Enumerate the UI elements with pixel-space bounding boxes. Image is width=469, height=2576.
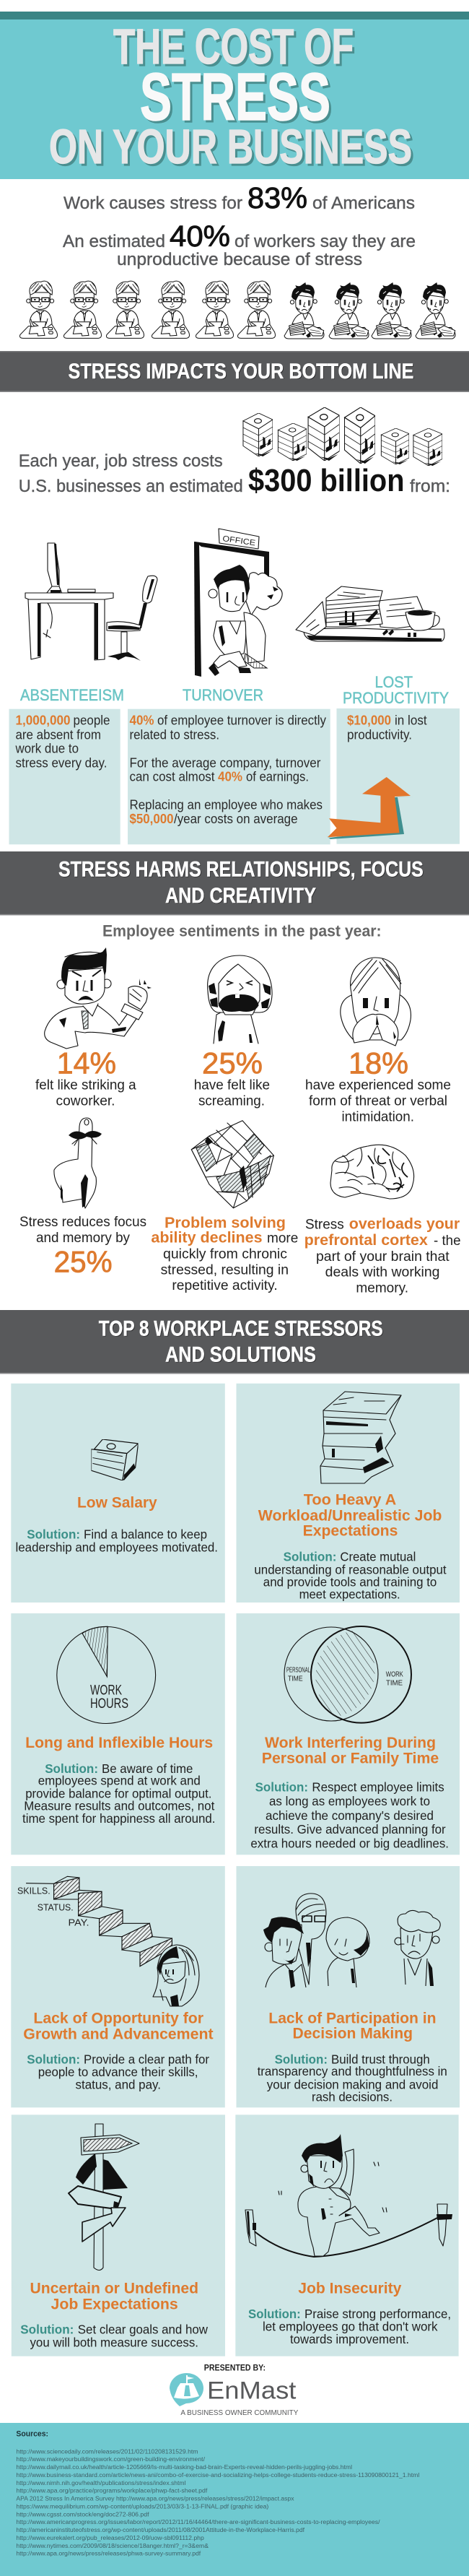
panel: too heavy a workload: and provide tools and training to bbox=[263, 1575, 437, 1590]
panel: absenteeism: are absent from bbox=[16, 727, 101, 742]
text: reduces focus and memory: Stress reduces focus bbox=[19, 1215, 146, 1230]
panel: lack of participation: Decision Making bbox=[293, 2026, 413, 2042]
panel: low salary: Solution: bbox=[27, 1527, 80, 1542]
panel: work interfering with personal time: Respect employee limits bbox=[312, 1780, 444, 1795]
panel: low salary bbox=[11, 1384, 225, 1603]
section header: bottom line: STRESS IMPACTS YOUR BOTTOM LINE bbox=[69, 360, 414, 384]
panel: turnover: /year costs on average bbox=[174, 812, 297, 826]
panel: too heavy a workload bbox=[237, 1384, 460, 1603]
title banner: STRESS bbox=[142, 61, 333, 136]
panel: too heavy a workload: Create mutual bbox=[340, 1550, 416, 1564]
panel: sources: http://www.americanprogress.org/issues/labor/report/2012/11/16/44464/there-are-significant-business-costs-to-replacing-employees/ bbox=[16, 2519, 380, 2525]
panel: long and inflexible hours: Solution: bbox=[45, 1761, 98, 1776]
text: overloads prefrontal cortex bbox=[304, 1216, 460, 1296]
panel: too heavy a workload: Expectations bbox=[303, 1523, 398, 1540]
icon: screaming woman bbox=[208, 955, 272, 1044]
icon: three coworkers huddled and one left out bbox=[263, 1894, 440, 1988]
stat: 83 percent bbox=[63, 181, 415, 214]
panel: sources: http://www.sciencedaily.com/releases/2011/02/110208131529.htm bbox=[16, 2448, 198, 2455]
text: overloads prefrontal cortex: prefrontal cortex bbox=[304, 1232, 428, 1249]
panel: uncertain job expectations bbox=[12, 2115, 225, 2356]
panel: sources bbox=[0, 2423, 469, 2576]
subheading: employee sentiments: Employee sentiments in the past year: bbox=[102, 922, 382, 940]
panel: work interfering with personal time: Solution: bbox=[255, 1780, 308, 1795]
text: overloads prefrontal cortex: Stress bbox=[305, 1218, 344, 1233]
cost statement: from: bbox=[410, 477, 450, 496]
icon: personal and work time venn diagram: TIME bbox=[386, 1679, 403, 1687]
stat: 18 percent threat or intimidation bbox=[305, 1046, 451, 1124]
panel: uncertain job expectations: Solution: bbox=[20, 2323, 74, 2337]
icon: employees walking out of the office bbox=[194, 529, 282, 677]
panel: lack of participation: your decision making and avoid bbox=[267, 2077, 438, 2091]
panel: long and inflexible hours: provide balance for optimal output. bbox=[25, 1786, 211, 1800]
panel: job insecurity: towards improvement. bbox=[290, 2332, 409, 2346]
section header: top 8 stressors: AND SOLUTIONS bbox=[165, 1343, 316, 1367]
panel: too heavy a workload: understanding of reasonable output bbox=[254, 1562, 447, 1577]
stat: 40 percent: 40% bbox=[170, 220, 230, 253]
panel: turnover: related to stress. bbox=[130, 727, 219, 742]
panel: long and inflexible hours: Measure results and outcomes, not bbox=[24, 1799, 214, 1813]
icon: work hours pie chart: WORK bbox=[90, 1683, 122, 1699]
icon: personal and work time venn diagram: TIME bbox=[288, 1675, 303, 1683]
stat: 14 percent felt like striking a coworker bbox=[35, 1046, 136, 1109]
stat: 40 percent: of workers say they are bbox=[234, 232, 416, 251]
section header: top 8 stressors: TOP 8 WORKPLACE STRESSORS bbox=[99, 1317, 383, 1340]
panel: work interfering with personal time bbox=[237, 1613, 460, 1855]
panel: long and inflexible hours: Be aware of time bbox=[102, 1761, 193, 1776]
panel: turnover: 40% bbox=[130, 713, 154, 727]
section header: relationships, focus and creativity: AND CREATIVITY bbox=[166, 885, 317, 908]
icon: personal and work time venn diagram bbox=[284, 1626, 411, 1723]
icon: work hours pie chart bbox=[57, 1626, 156, 1723]
panel: turnover bbox=[128, 709, 330, 844]
icon: personal and work time venn diagram: WORK bbox=[386, 1671, 403, 1679]
cost statement: Each year, job stress costs bbox=[19, 451, 223, 471]
label: absenteeism: ABSENTEEISM bbox=[20, 686, 124, 704]
panel: lost productivity bbox=[336, 708, 460, 844]
text: reduces focus and memory bbox=[19, 1215, 146, 1279]
icon: staircase with skills status pay and worried woman: STATUS. bbox=[38, 1902, 74, 1913]
stat: 14 percent felt like striking a coworker: felt like striking a bbox=[35, 1077, 136, 1093]
title banner: STRESS bbox=[140, 59, 330, 134]
panel: long and inflexible hours: time spent for happiness all around. bbox=[22, 1811, 215, 1826]
panel: work interfering with personal time: Personal or Family Time bbox=[262, 1751, 439, 1767]
logo: EnMast bbox=[170, 2373, 299, 2417]
stat: 25 percent felt like screaming: 25% bbox=[202, 1046, 263, 1080]
panel: lost productivity: $10,000 bbox=[347, 713, 391, 727]
label: lost productivity: LOST bbox=[375, 673, 413, 691]
label: lost productivity bbox=[343, 673, 449, 707]
panel: turnover: of earnings. bbox=[246, 770, 309, 784]
panel: sources: http://www.dailymail.co.uk/health/article-1205669/Is-multi-tasking-bad-brain-Experts-reveal-hidden-perils-juggling-jobs.html bbox=[16, 2464, 352, 2471]
cost statement bbox=[19, 451, 450, 498]
panel: absenteeism: work due to bbox=[15, 741, 79, 755]
panel: work interfering with personal time: extra hours needed or big deadlines. bbox=[250, 1836, 449, 1850]
panel: absenteeism: people bbox=[74, 713, 110, 727]
text: overloads prefrontal cortex: memory. bbox=[356, 1280, 408, 1296]
text: problem solving declines: stressed, resulting in bbox=[161, 1262, 289, 1278]
panel: work interfering with personal time: results. Give advanced planning for bbox=[254, 1822, 446, 1836]
section header: bottom line bbox=[0, 351, 469, 392]
text: overloads prefrontal cortex: deals with working bbox=[325, 1265, 440, 1280]
section header: top 8 stressors bbox=[0, 1310, 469, 1374]
stat: 83 percent: 83% bbox=[247, 181, 307, 214]
text: reduces focus and memory: 25% bbox=[54, 1245, 113, 1279]
icon: signpost with conflicting arrows bbox=[69, 2124, 139, 2271]
stat: 18 percent threat or intimidation: form of threat or verbal bbox=[309, 1094, 447, 1109]
panel: sources: http://www.eurekalert.org/pub_releases/2012-09/uow-sbl091112.php bbox=[16, 2535, 204, 2541]
panel: sources: http://www.makeyourbuildingswork.com/green-building-environment/ bbox=[16, 2456, 206, 2463]
panel: lack of participation: Lack of Participation in bbox=[268, 2011, 436, 2027]
panel: turnover: of employee turnover is directly bbox=[157, 713, 326, 727]
panel: job insecurity: Solution: bbox=[248, 2307, 301, 2321]
text: problem solving declines bbox=[151, 1215, 298, 1293]
panel: turnover: For the average company, turnover bbox=[130, 755, 320, 770]
title banner: THE COST OF bbox=[113, 19, 354, 74]
panel: sources: APA 2012 Stress In America Survey http://www.apa.org/news/press/releases/stress/2012/impact.aspx bbox=[16, 2496, 294, 2502]
text: overloads prefrontal cortex: part of your brain that bbox=[316, 1249, 450, 1265]
panel: work interfering with personal time: achieve the company's desired bbox=[266, 1808, 434, 1823]
panel: lack of participation bbox=[237, 1866, 460, 2107]
panel: work interfering with personal time: as long as employees work to bbox=[269, 1794, 430, 1808]
icon: rising arrow bbox=[326, 777, 414, 839]
panel: turnover: can cost almost bbox=[130, 770, 215, 784]
panel: long and inflexible hours: employees spend at work and bbox=[38, 1774, 201, 1788]
icon: staircase with skills status pay and worried woman: SKILLS. bbox=[17, 1886, 51, 1896]
presented by label: PRESENTED BY: bbox=[204, 2362, 266, 2372]
icon: empty desk and chair bbox=[25, 543, 157, 661]
stat: 18 percent threat or intimidation: have experienced some bbox=[305, 1077, 451, 1093]
section header: bottom line: STRESS IMPACTS YOUR BOTTOM LINE bbox=[68, 360, 414, 383]
icon: man on a tightrope bbox=[245, 2134, 452, 2257]
panel: lack of participation: rash decisions. bbox=[312, 2089, 393, 2104]
logo: EnMast: EnMast bbox=[207, 2377, 297, 2405]
stat: 25 percent felt like screaming: screaming. bbox=[198, 1094, 265, 1109]
panel: uncertain job expectations: Set clear goals and how bbox=[78, 2323, 208, 2337]
panel: sources: http://www.apa.org/practice/programs/workplace/phwp-fact-sheet.pdf bbox=[16, 2488, 208, 2494]
stat: 40 percent: unproductive because of stress bbox=[117, 250, 362, 269]
text: problem solving declines: Problem solving bbox=[165, 1215, 286, 1231]
icon: employees walking out of the office: OFFICE bbox=[222, 534, 256, 547]
label: turnover: TURNOVER bbox=[183, 686, 263, 704]
icon: brain bbox=[330, 1145, 414, 1199]
stat: 25 percent felt like screaming bbox=[194, 1046, 270, 1109]
icon: personal and work time venn diagram: PERSONAL bbox=[286, 1667, 310, 1675]
icon: cash stack bbox=[91, 1439, 139, 1480]
title banner: THE COST OF bbox=[115, 21, 356, 77]
icon: stack of books and papers bbox=[320, 1392, 401, 1483]
icon: staircase with skills status pay and worried woman bbox=[17, 1876, 199, 2006]
icon: twisted puzzle cube bbox=[191, 1121, 273, 1208]
panel: long and inflexible hours bbox=[11, 1613, 225, 1855]
panel: lack of opportunity bbox=[11, 1866, 225, 2107]
panel: lack of opportunity: people to advance their skills, bbox=[38, 2065, 198, 2079]
icon: stacks of cash bbox=[243, 407, 442, 466]
panel: lack of opportunity: status, and pay. bbox=[75, 2078, 161, 2092]
panel: job insecurity bbox=[235, 2115, 459, 2356]
cost statement: $300 billion bbox=[248, 463, 404, 498]
panel: lost productivity: productivity. bbox=[347, 727, 412, 742]
panel: sources: http://americaninstituteofstress.org/wp-content/uploads/2011/08/2001Attitude-in-the-Workplace-Harris.pdf bbox=[16, 2527, 305, 2533]
panel: turnover: $50,000 bbox=[130, 812, 173, 826]
panel: job insecurity: let employees go that don't work bbox=[263, 2320, 438, 2334]
panel: uncertain job expectations: Uncertain or Undefined bbox=[30, 2281, 198, 2297]
stat: 83 percent: Work causes stress for bbox=[63, 194, 242, 213]
panel: lack of participation: Build trust through bbox=[331, 2052, 430, 2066]
label: lost productivity: PRODUCTIVITY bbox=[343, 689, 449, 707]
panel: sources: https://www.mequilibrium.com/wp-content/uploads/2013/03/3-1-13-FINAL.pdf (graphic idea) bbox=[16, 2503, 269, 2510]
panel: lack of participation: transparency and thoughtfulness in bbox=[258, 2064, 447, 2078]
panel: sources: http://www.apa.org/news/press/releases/phwa-survey-summary.pdf bbox=[16, 2551, 201, 2557]
stat: 14 percent felt like striking a coworker: coworker. bbox=[56, 1094, 115, 1109]
stat: 25 percent felt like screaming: have felt like bbox=[194, 1077, 270, 1093]
section header: relationships, focus and creativity: AND CREATIVITY bbox=[165, 884, 316, 908]
panel: low salary: leadership and employees motivated. bbox=[16, 1540, 218, 1554]
text: overloads prefrontal cortex: - the bbox=[434, 1233, 460, 1249]
text: problem solving declines: more bbox=[267, 1231, 298, 1246]
panel: absenteeism bbox=[9, 709, 120, 844]
stat: 40 percent bbox=[63, 220, 416, 269]
panel: sources: http://www.nytimes.com/2009/08/18/science/18anger.html?_r=3&em& bbox=[16, 2543, 209, 2549]
panel: lack of opportunity: Provide a clear path for bbox=[84, 2052, 209, 2067]
icon: frightened woman bbox=[341, 958, 411, 1046]
icon: staircase with skills status pay and worried woman: PAY. bbox=[68, 1917, 89, 1928]
stat: 40 percent: An estimated bbox=[63, 232, 165, 251]
stat: 83 percent: of Americans bbox=[312, 194, 415, 213]
text: reduces focus and memory: and memory by bbox=[36, 1231, 130, 1246]
panel: uncertain job expectations: Job Expectations bbox=[51, 2296, 178, 2312]
icon: finger with string bbox=[54, 1118, 102, 1208]
section header: top 8 stressors: AND SOLUTIONS bbox=[166, 1344, 317, 1368]
section header: top 8 stressors: TOP 8 WORKPLACE STRESSORS bbox=[100, 1317, 384, 1341]
panel: too heavy a workload: Solution: bbox=[284, 1550, 336, 1564]
icon: messy paperwork and coffee bbox=[296, 586, 444, 641]
panel: low salary: Low Salary bbox=[77, 1494, 157, 1511]
icon: angry man bbox=[45, 947, 152, 1049]
panel: absenteeism: stress every day. bbox=[16, 755, 107, 770]
text: overloads prefrontal cortex: overloads your bbox=[349, 1216, 460, 1233]
cost statement: U.S. businesses an estimated bbox=[19, 477, 243, 496]
text: problem solving declines: quickly from chronic bbox=[163, 1247, 287, 1262]
stat: 18 percent threat or intimidation: 18% bbox=[349, 1046, 408, 1080]
stat: 18 percent threat or intimidation: intimidation. bbox=[342, 1109, 414, 1124]
panel: work interfering with personal time: Work Interfering During bbox=[265, 1735, 436, 1751]
panel: sources: http://www.nimh.nih.gov/health/publications/stress/index.shtml bbox=[16, 2480, 186, 2486]
panel: sources: http://www.business-standard.com/article/news-ani/combo-of-exercise-and-socializing-helps-college-students-reduce-stress-113090800121_1.html bbox=[16, 2472, 420, 2479]
logo: EnMast: A BUSINESS OWNER COMMUNITY bbox=[180, 2409, 299, 2417]
panel: sources: http://www.cgsst.com/stock/eng/doc272-806.pdf bbox=[16, 2511, 149, 2518]
panel: turnover: 40% bbox=[218, 770, 242, 784]
panel: lack of opportunity: Lack of Opportunity for bbox=[33, 2011, 203, 2027]
panel: too heavy a workload: Too Heavy A bbox=[304, 1491, 396, 1508]
section header: relationships, focus and creativity bbox=[0, 851, 469, 915]
panel: lost productivity: in lost bbox=[395, 713, 427, 727]
panel: lack of opportunity: Growth and Advancement bbox=[23, 2026, 214, 2042]
panel: too heavy a workload: meet expectations. bbox=[299, 1587, 400, 1601]
panel: lack of participation: Solution: bbox=[275, 2052, 328, 2066]
panel: job insecurity: Job Insecurity bbox=[298, 2281, 402, 2297]
text: problem solving declines: repetitive activity. bbox=[172, 1278, 278, 1293]
text: problem solving declines: ability declines bbox=[151, 1230, 263, 1246]
icon: work hours pie chart: HOURS bbox=[90, 1696, 128, 1712]
panel: lack of opportunity: Solution: bbox=[27, 2052, 80, 2067]
stat: 14 percent felt like striking a coworker: 14% bbox=[57, 1046, 116, 1080]
panel: sources: Sources: bbox=[16, 2429, 48, 2438]
panel: long and inflexible hours: Long and Inflexible Hours bbox=[25, 1735, 213, 1751]
panel: absenteeism: 1,000,000 bbox=[16, 713, 71, 727]
panel: too heavy a workload: Workload/Unrealistic Job bbox=[258, 1507, 442, 1524]
pictogram: six calm and four stressed workers bbox=[20, 281, 455, 339]
panel: low salary: Find a balance to keep bbox=[84, 1527, 207, 1542]
title banner bbox=[0, 12, 469, 179]
panel: uncertain job expectations: you will both measure success. bbox=[30, 2335, 198, 2349]
panel: turnover: Replacing an employee who makes bbox=[130, 798, 323, 812]
panel: job insecurity: Praise strong performance, bbox=[304, 2307, 451, 2321]
